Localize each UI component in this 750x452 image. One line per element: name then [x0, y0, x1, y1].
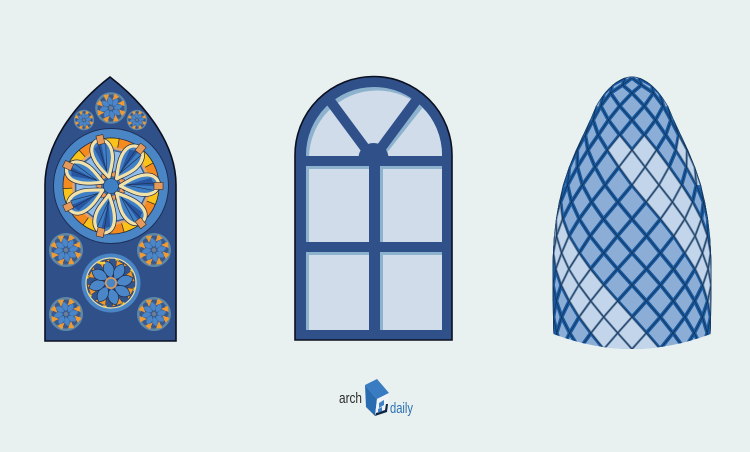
- lattice thick lines: [552, 78, 712, 365]
- icon: building cube: [365, 379, 389, 416]
- logo word: arch: arch: [339, 390, 362, 407]
- tower outline: [552, 76, 712, 334]
- glass base: [552, 76, 711, 349]
- lattice core lines: [552, 78, 712, 365]
- arched fan light: [306, 87, 442, 156]
- pane: lower right: [380, 252, 442, 330]
- window frame: [295, 77, 452, 340]
- light glass bands: [553, 136, 712, 349]
- panel: gherkin tower facade: [552, 76, 712, 349]
- pane: upper right: [380, 166, 442, 242]
- pane: upper left: [306, 166, 369, 242]
- right spoke shadow: [383, 100, 421, 148]
- large rose window: [54, 128, 168, 244]
- small rosette middle left: [49, 233, 83, 267]
- horizontal transom: [300, 156, 446, 166]
- panel: gothic stained-glass window: [45, 77, 176, 341]
- pane: lower left: [306, 252, 369, 330]
- arch spokes: [328, 98, 418, 152]
- window frame: [45, 77, 176, 341]
- hub: [358, 143, 388, 173]
- logo word: daily: daily: [390, 400, 413, 417]
- small rosette middle right: [137, 233, 171, 267]
- small rosette top right: [127, 110, 147, 130]
- medium rosette: [82, 254, 140, 312]
- small rosette bottom left: [49, 297, 83, 331]
- small rosette bottom right: [137, 297, 171, 331]
- logo: arch daily: [339, 379, 413, 417]
- panel: arched mullion window: [295, 77, 452, 340]
- small rosette top centre: [95, 92, 127, 124]
- small rosette top left: [74, 110, 94, 130]
